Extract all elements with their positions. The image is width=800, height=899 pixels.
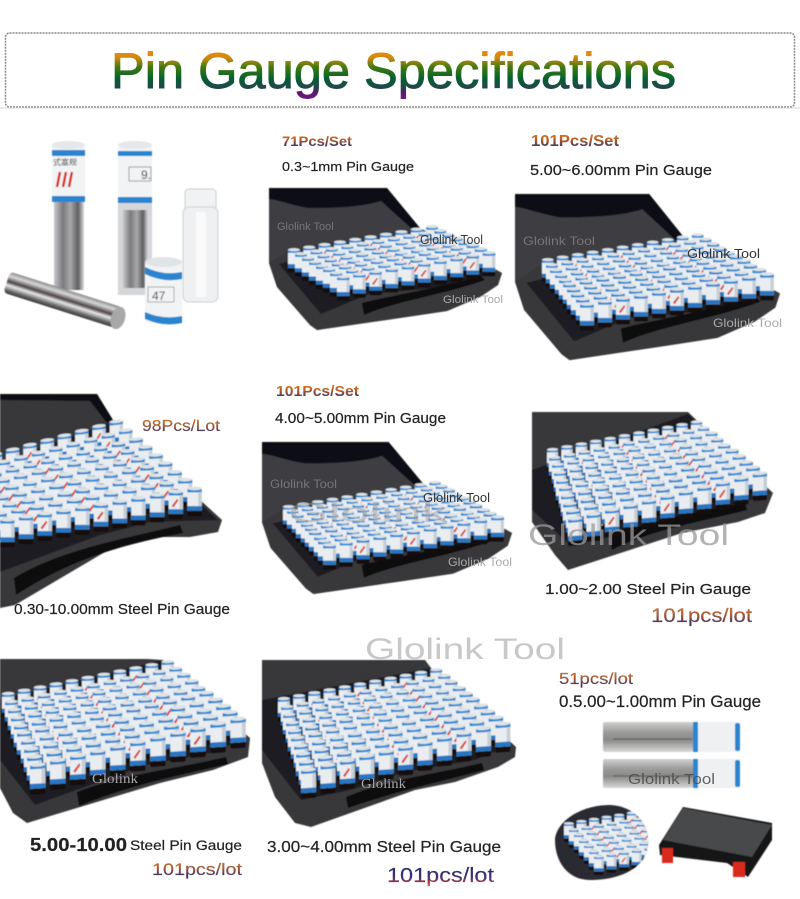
watermarks on 4.00-5.00 case: Glolink Tool (270, 477, 337, 491)
label: 101pcs/lot right: 101pcs/lot (651, 606, 753, 627)
vial with red logo (52, 141, 85, 290)
vial with size label (118, 141, 152, 295)
empty clear tube (183, 189, 218, 302)
watermarks on 71 pcs case: Glolink Tool (420, 232, 483, 247)
label: 0.5.00~1.00mm Pin Gauge: 0.5.00~1.00mm Pin Gauge (559, 693, 761, 711)
title banner (0, 33, 800, 108)
case: 0.30-10.00 mm (cropped left) (0, 394, 222, 608)
case: 4.00-5.00 mm (262, 442, 512, 594)
watermark: large Glolink Tool: Glolink Tool (528, 519, 729, 552)
watermark: Glolink Tool above lower row: Glolink Tool (365, 633, 565, 666)
watermarks on 4.00-5.00 case: Glolink Tool (448, 555, 512, 569)
label: 101Pcs/Set top right: 101Pcs/Set (531, 133, 619, 150)
watermarks on 5.00-6.00 case: Glolink Tool (687, 246, 760, 261)
watermark: Glolink on 3.00-4.00 case: Glolink (361, 777, 406, 792)
case: 5.00-6.00 mm (515, 194, 780, 360)
case: 3.00-4.00 mm (262, 660, 516, 827)
label: 5.00~6.00mm Pin Gauge: 5.00~6.00mm Pin Gauge (530, 162, 712, 179)
watermarks on 71 pcs case: Glolink Tool (443, 294, 503, 306)
vial rows (288, 225, 495, 301)
watermarks on 71 pcs case: Glolink Tool (277, 221, 334, 233)
label: 5.00-10.00 Steel Pin Gauge (30, 835, 242, 855)
title: Pin Gauge Specifications (111, 43, 676, 99)
label: 101Pcs/Set middle: 101Pcs/Set (276, 384, 359, 400)
watermark: Glolink on 5.00-10.00 case: Glolink (92, 772, 138, 787)
upper tube (603, 722, 740, 752)
label: 4.00~5.00mm Pin Gauge: 4.00~5.00mm Pin Gauge (275, 411, 446, 427)
watermarks on 71 pcs case (277, 221, 503, 306)
watermarks on 4.00-5.00 case (270, 477, 512, 569)
watermarks on 4.00-5.00 case: Glolink Tool (423, 490, 490, 505)
label: 71Pcs/Set: 71Pcs/Set (282, 133, 352, 149)
close-up of vials in case (554, 804, 649, 881)
label: 3.00~4.00mm Steel Pin Gauge: 3.00~4.00mm Steel Pin Gauge (267, 839, 501, 856)
label: 1.00~2.00 Steel Pin Gauge: 1.00~2.00 Steel Pin Gauge (545, 582, 751, 598)
label: 0.30-10.00mm Steel Pin Gauge: 0.30-10.00mm Steel Pin Gauge (14, 602, 230, 618)
vial cap: 47 (152, 289, 166, 303)
vial rows (283, 481, 504, 570)
label: 51pcs/lot: 51pcs/lot (559, 671, 634, 688)
vial rows (547, 420, 767, 546)
tube pair (603, 722, 740, 788)
vial with red logo: 式塞规 (53, 157, 77, 167)
label: 0.3~1mm Pin Gauge: 0.3~1mm Pin Gauge (282, 159, 414, 174)
steel pin (3, 272, 128, 331)
lower tube (603, 759, 740, 788)
red latch left (662, 848, 673, 863)
case: 1.00-2.00 mm (532, 412, 773, 570)
label: 98Pcs/Lot: 98Pcs/Lot (142, 418, 221, 435)
closed case with red latches (659, 807, 772, 877)
label: 5.00-10.00 Steel Pin Gauge: 5.00-10.00 (30, 835, 127, 855)
vial rows (2, 660, 246, 795)
label: 5.00-10.00 Steel Pin Gauge: Steel Pin Gauge (130, 837, 242, 853)
vial cap (145, 257, 182, 324)
vial rows (278, 668, 510, 799)
vial rows (542, 233, 774, 330)
watermarks on 4.00-5.00 case: Glolink (288, 497, 450, 528)
watermark on lower tube: Glolink Tool (628, 771, 715, 788)
case: 5.00-10.00 mm (0, 659, 250, 823)
watermarks on 5.00-6.00 case: Glolink Tool (523, 234, 595, 248)
vial with size label: 9. (141, 168, 151, 182)
watermarks on 5.00-6.00 case: Glolink Tool (713, 316, 782, 330)
red latch right (733, 862, 745, 877)
label: 101pcs/lot lower left: 101pcs/lot (152, 860, 242, 879)
photo: loose gauge pin and vials (3, 141, 218, 331)
case: 71 pcs set (269, 188, 502, 330)
watermarks on 5.00-6.00 case (523, 234, 782, 330)
vial rows (0, 419, 202, 557)
label: 101pcs/lot lower middle: 101pcs/lot (387, 865, 495, 887)
